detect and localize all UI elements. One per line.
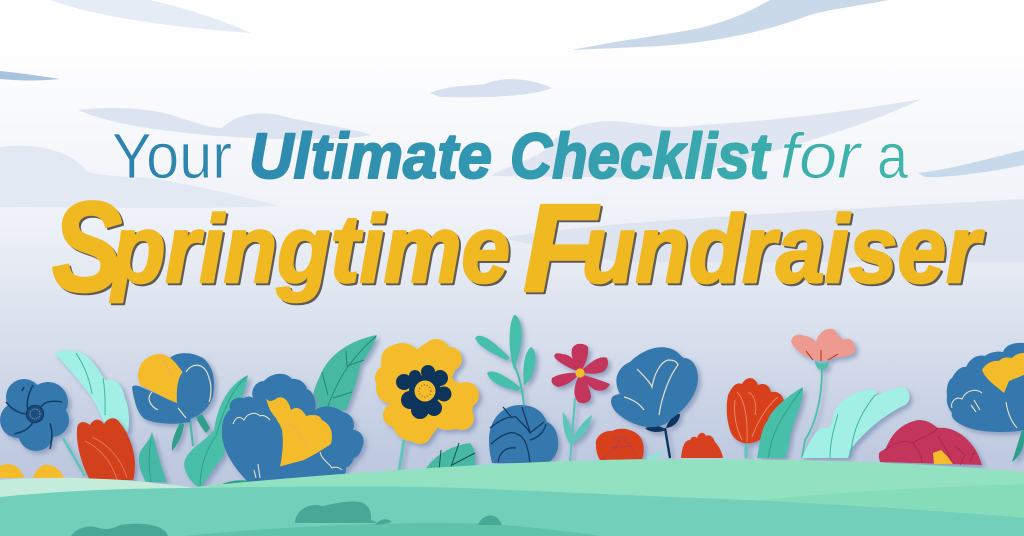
icon: aqua leaf behind red tulip — [55, 350, 129, 432]
title line two: Springtime Fundraiser: undraiser — [582, 196, 984, 303]
title line one: Your Ultimate Checklist for a: Ultimate — [249, 120, 492, 192]
icon: aqua leaf piece — [646, 449, 665, 460]
icon: short red tulip — [681, 433, 723, 458]
title line two: Springtime Fundraiser: F — [523, 180, 600, 318]
icon: aqua leaves right — [802, 387, 910, 458]
title — [52, 120, 984, 319]
title line one: Your Ultimate Checklist for a: Your — [112, 120, 232, 192]
icon: small yellow buds, bottom left — [0, 464, 64, 478]
hills — [0, 459, 1024, 536]
icon: blue and yellow flower at right edge — [947, 343, 1024, 462]
icon: large teal leaf with veins — [312, 335, 377, 412]
right green band — [760, 484, 1024, 536]
icon: peony blue and yellow — [132, 353, 214, 451]
title line two: Springtime Fundraiser: pringtime — [109, 196, 510, 303]
title line one: Your Ultimate Checklist for a: a — [877, 120, 908, 192]
light green hill — [195, 459, 1024, 536]
icon: blue peony with navy lines — [489, 405, 558, 463]
title line two: Springtime Fundraiser — [52, 176, 984, 319]
icon: teal sprig — [475, 315, 536, 405]
icon: crimson rose — [879, 420, 982, 465]
title line one: Your Ultimate Checklist for a: for — [780, 120, 863, 192]
icon: long teal leaf — [184, 375, 248, 488]
far left pale hill — [0, 478, 200, 500]
icon: pink flower on stem — [791, 329, 855, 458]
teal foreground hill — [0, 486, 1024, 536]
icon: small red rose — [596, 429, 644, 460]
icon: teal leaf beside tulip — [757, 387, 803, 458]
title line one: Your Ultimate Checklist for a — [112, 120, 908, 192]
clouds — [0, 0, 1024, 262]
bushes — [71, 501, 502, 536]
flowers — [0, 315, 1024, 488]
dark foreground hill — [185, 523, 600, 536]
icon: yellow flower with navy centre — [375, 339, 479, 471]
icon: blue tulip — [611, 347, 698, 458]
title line two: Springtime Fundraiser: S — [52, 176, 122, 319]
icon: tall red tulip — [727, 378, 784, 458]
icon: crimson daisy — [552, 344, 610, 462]
title line one: Your Ultimate Checklist for a: Checklist — [510, 120, 771, 192]
icon: small teal leaf — [139, 432, 167, 482]
icon: red tulip left — [77, 418, 135, 480]
icon: small leaf with dark veins — [425, 443, 475, 470]
icon: big blue flower with yellow centre — [222, 374, 364, 486]
icon: blue poppy flower — [0, 379, 85, 476]
